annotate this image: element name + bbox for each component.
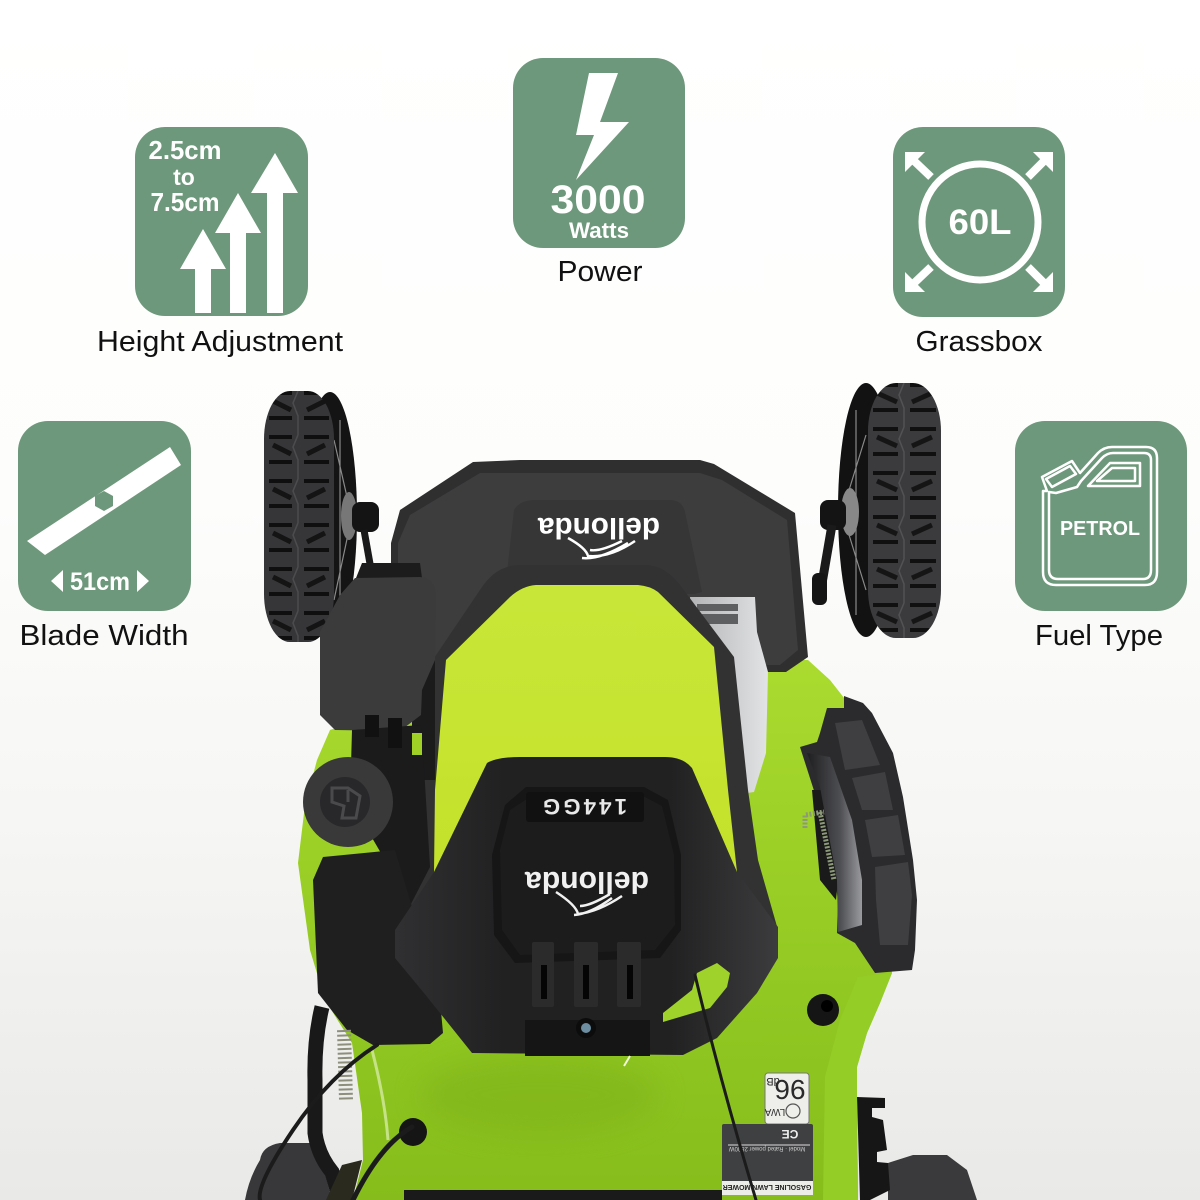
engine cover xyxy=(395,565,778,930)
blade centre hole xyxy=(95,491,113,511)
label: blade width: Blade Width xyxy=(20,620,188,652)
expansion arrows xyxy=(905,152,1053,292)
air filter box xyxy=(320,563,436,935)
power unit: Watts xyxy=(569,218,629,243)
front left wheel xyxy=(245,1143,332,1200)
hood logo xyxy=(538,511,660,558)
console screw xyxy=(525,1018,650,1056)
height arrows xyxy=(180,153,298,313)
console cut-out xyxy=(663,963,730,1022)
height range text: 2.5cm xyxy=(148,135,222,165)
bottom strip xyxy=(404,1190,722,1200)
icon card: fuel type xyxy=(1015,421,1187,611)
console logo xyxy=(524,865,649,915)
front right wheel xyxy=(888,1155,977,1200)
deck fold highlight xyxy=(823,973,892,1200)
height range text: to xyxy=(173,164,195,190)
power value: 3000 xyxy=(550,178,646,222)
jerry can xyxy=(1042,447,1157,585)
grip panels xyxy=(835,720,912,945)
console slots xyxy=(532,942,641,1007)
mower deck xyxy=(298,640,892,1200)
icon card: blade width xyxy=(18,421,191,611)
noise label: 96 xyxy=(774,1074,806,1105)
lightning bolt xyxy=(576,73,629,180)
filter clips xyxy=(365,715,402,748)
width arrows xyxy=(51,570,149,592)
photo: lawn mower xyxy=(245,383,977,1200)
engine cover lime panel xyxy=(434,585,737,872)
gloss strip xyxy=(807,753,862,932)
noise label: dB xyxy=(766,1075,780,1087)
lime gap xyxy=(412,733,422,755)
spring xyxy=(805,812,834,880)
rating plate: Model · Rated power 2800W xyxy=(728,1145,805,1151)
fuel cap xyxy=(303,757,393,847)
fuel type value: PETROL xyxy=(1060,517,1140,540)
noise label: LWA xyxy=(764,1106,785,1117)
capacity circle xyxy=(922,164,1038,280)
rating plate xyxy=(722,1124,813,1195)
label: fuel type: Fuel Type xyxy=(1035,620,1163,652)
console logo: dellonda xyxy=(524,865,649,900)
silver panel xyxy=(690,597,768,800)
noise label xyxy=(764,1073,809,1124)
rating plate: CE xyxy=(782,1127,798,1141)
capacity value: 60L xyxy=(948,203,1012,242)
label: grassbox: Grassbox xyxy=(916,326,1043,358)
side grip handle xyxy=(800,696,917,973)
rear left wheel xyxy=(264,391,379,642)
filter backing xyxy=(412,640,435,780)
model plate xyxy=(526,792,644,822)
model plate: 144GG xyxy=(543,794,627,819)
rear right wheel xyxy=(812,383,941,638)
height range text: 7.5cm xyxy=(150,187,220,217)
central console xyxy=(395,757,778,1055)
deck highlight xyxy=(624,1056,630,1066)
fuel tank xyxy=(313,850,443,1045)
silver vents xyxy=(697,604,738,624)
engine neck xyxy=(350,725,430,935)
hood logo: dellonda xyxy=(538,511,660,544)
icon card: grassbox xyxy=(893,127,1065,317)
blade xyxy=(27,447,181,555)
label: power: Power xyxy=(558,256,643,288)
cables xyxy=(260,975,756,1200)
spring housing xyxy=(812,790,838,900)
rear hood xyxy=(391,460,808,700)
icon card: height adjustment xyxy=(135,127,308,316)
blade width value: 51cm xyxy=(70,568,130,596)
icon card: power xyxy=(513,58,685,248)
rating plate: GASOLINE LAWN MOWER xyxy=(723,1183,811,1190)
deck reflection xyxy=(372,1050,388,1140)
height range text xyxy=(148,135,222,217)
right height bracket xyxy=(857,1097,890,1200)
deck bolts xyxy=(399,994,839,1146)
label: height adjustment: Height Adjustment xyxy=(97,326,343,358)
left handle and spring xyxy=(315,1007,362,1200)
deck shading xyxy=(420,1055,660,1135)
